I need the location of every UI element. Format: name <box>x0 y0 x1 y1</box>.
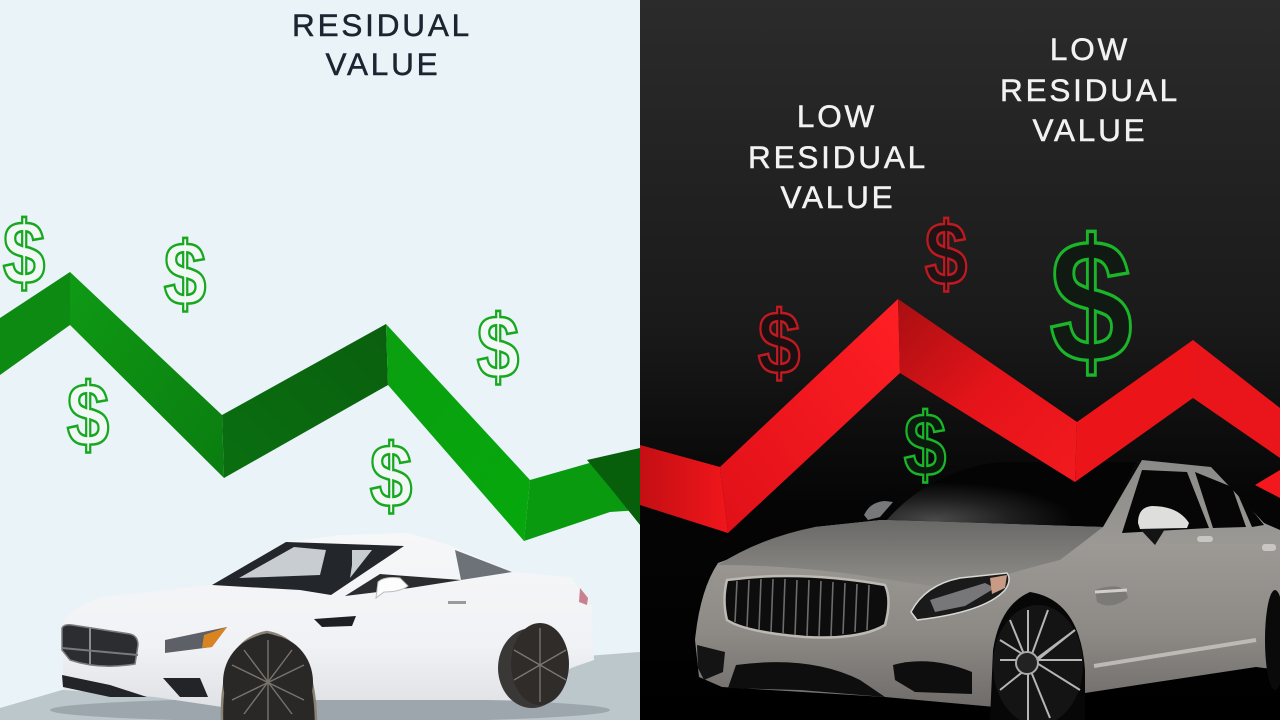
heading: low residual value left: LOW <box>797 98 877 134</box>
dollar signs: red and green: $ <box>1049 203 1133 400</box>
windshield <box>885 462 1136 530</box>
door detail <box>1095 586 1128 606</box>
dollar signs: green: $ <box>477 296 519 397</box>
dollar signs: green: $ <box>67 364 109 465</box>
heading: residual value: VALUE <box>326 46 440 82</box>
dollar signs: red and green <box>758 203 1133 495</box>
heading: low residual value right: VALUE <box>1033 112 1147 148</box>
headlight <box>911 573 1009 620</box>
panel: light side <box>0 0 640 720</box>
heading: low residual value left: RESIDUAL <box>748 139 928 175</box>
heading: low residual value left: VALUE <box>781 179 895 215</box>
heading: low residual value right: LOW <box>1050 31 1130 67</box>
car: white coupe <box>50 533 610 720</box>
panel: dark side <box>640 0 1280 720</box>
dollar signs: red and green: $ <box>904 394 946 495</box>
bumper intakes <box>697 645 725 680</box>
dollar signs: red and green: $ <box>758 292 800 393</box>
grille <box>62 625 138 666</box>
dollar signs: green: $ <box>370 425 412 526</box>
grille <box>724 576 888 638</box>
heading: residual value: RESIDUAL <box>292 7 472 43</box>
front wheel <box>993 605 1083 720</box>
dollar signs: red and green: $ <box>925 203 967 304</box>
dollar signs: green: $ <box>164 223 206 324</box>
red zigzag arrow <box>640 299 1280 533</box>
floor <box>0 652 640 720</box>
dollar signs: green: $ <box>3 202 45 303</box>
green zigzag arrow <box>0 272 640 541</box>
heading: low residual value right: RESIDUAL <box>1000 72 1180 108</box>
car: grey sedan <box>695 460 1280 720</box>
dollar signs: green <box>3 202 519 526</box>
